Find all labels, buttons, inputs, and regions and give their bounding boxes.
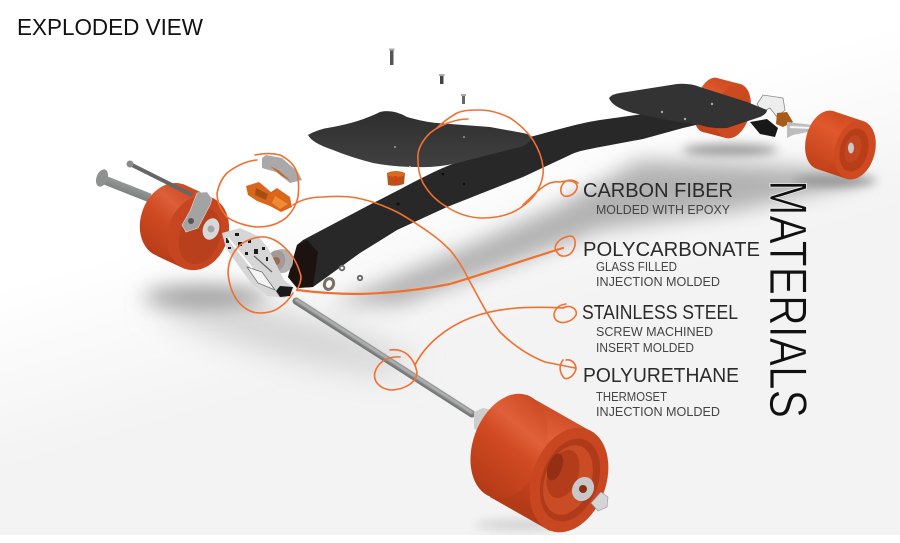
polyurethane callout [217,154,576,379]
front carbon fiber plate [308,111,532,168]
transparent polycarbonate truck [222,228,294,298]
stainless steel label: STAINLESS STEEL [582,302,738,324]
polyurethane label: POLYURETHANE [583,365,739,387]
main carbon fiber deck [288,112,700,288]
deck mounting holes [396,173,465,206]
carbon fiber label: CARBON FIBER [583,180,733,202]
spacer cylinder [264,248,293,274]
rear right wheel [799,106,882,184]
polycarbonate callout [228,236,575,313]
stainless steel callout [375,304,576,390]
exploded truck parts: bracket and orange bushing block [246,155,302,212]
materials heading: MATERIALS [758,180,817,418]
orange polyurethane bushing [387,171,405,186]
polyurethane label [583,365,739,419]
front axle [296,300,472,414]
front wheel [457,383,622,543]
orange callout lines [217,110,578,390]
stainless steel label: SCREW MACHINED [596,325,713,339]
polycarbonate label: POLYCARBONATE [583,239,760,261]
thick long bolt [94,168,150,198]
title: EXPLODED VIEW [17,14,203,40]
stainless steel label [582,302,738,355]
screws [389,48,466,104]
stainless steel label: INSERT MOLDED [596,341,694,355]
polyurethane label: THERMOSET [596,390,667,404]
rear left wheel [688,74,757,142]
left truck hanger bracket [182,192,222,242]
carbon fiber label [583,180,733,217]
left wheel [130,174,239,279]
washers and nuts near deck end [323,266,362,291]
thin long bolt [126,160,192,195]
carbon fiber callout [418,110,578,218]
polycarbonate label [583,239,760,289]
rear carbon fiber plate [609,84,767,128]
polycarbonate label: GLASS FILLED [596,260,677,274]
carbon fiber label: MOLDED WITH EPOXY [596,203,731,217]
dark deck end face [288,240,318,288]
polycarbonate label: INJECTION MOLDED [596,275,720,289]
polyurethane label: INJECTION MOLDED [596,405,720,419]
rear truck [750,95,813,138]
materials list [582,180,760,419]
